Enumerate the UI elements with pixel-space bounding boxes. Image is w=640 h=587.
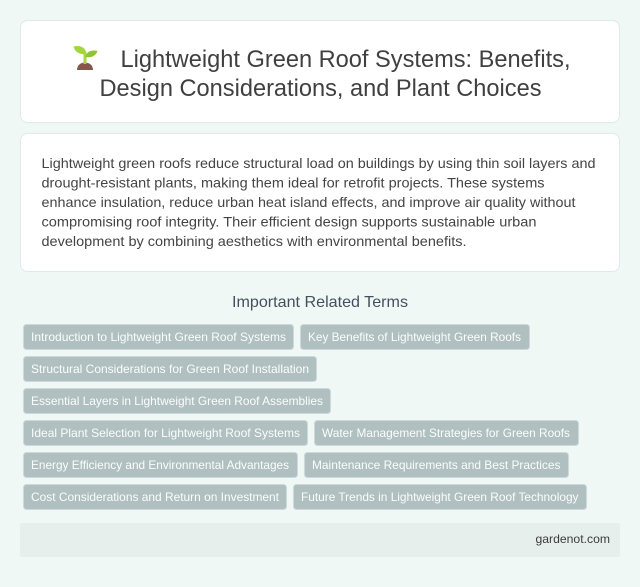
icon: seedling (74, 46, 98, 70)
tag (24, 356, 316, 382)
text block: description (42, 155, 596, 249)
panel: description (20, 134, 620, 272)
tag (24, 420, 308, 446)
tag (294, 484, 586, 510)
tag (304, 452, 568, 478)
tag: Key Benefits of Lightweight Green Roofs (308, 330, 521, 344)
title: Lightweight Green Roof Systems: Benefits, (120, 46, 570, 73)
panel: term tags (24, 324, 586, 510)
tag: Ideal Plant Selection for Lightweight Roof Systems (31, 426, 300, 440)
tag: Essential Layers in Lightweight Green Roof Assemblies (31, 394, 323, 408)
text block: description: Lightweight green roofs reduce structural load on buildings by using thin soil layers and (42, 155, 596, 171)
tag: Cost Considerations and Return on Investment (31, 490, 280, 504)
tag: Energy Efficiency and Environmental Advantages (31, 458, 289, 472)
tag (300, 324, 530, 350)
title (100, 46, 570, 102)
panel: header (20, 20, 620, 122)
footer: gardenot.com (536, 532, 610, 546)
tag (314, 420, 578, 446)
heading: related terms: Important Related Terms (232, 294, 408, 311)
tag (24, 484, 286, 510)
text block: description: drought-resistant plants, making them ideal for retrofit projects. These systems (42, 174, 544, 190)
tag (24, 388, 330, 414)
tag (24, 324, 294, 350)
text block: description: compromising roof integrity. Their efficient design supports sustainable urban (42, 214, 536, 230)
tag: Introduction to Lightweight Green Roof Systems (31, 330, 286, 344)
footer (20, 523, 620, 557)
text block: description: enhance insulation, reduce urban heat island effects, and improve air quality without (42, 194, 576, 210)
tag: Maintenance Requirements and Best Practices (312, 458, 560, 472)
title: Design Considerations, and Plant Choices (100, 75, 542, 102)
tag: Future Trends in Lightweight Green Roof Technology (301, 490, 578, 504)
text block: description: development by combining aesthetics with environmental benefits. (42, 233, 466, 249)
tag: Water Management Strategies for Green Roofs (322, 426, 570, 440)
tag (24, 452, 298, 478)
tag: Structural Considerations for Green Roof Installation (31, 362, 309, 376)
